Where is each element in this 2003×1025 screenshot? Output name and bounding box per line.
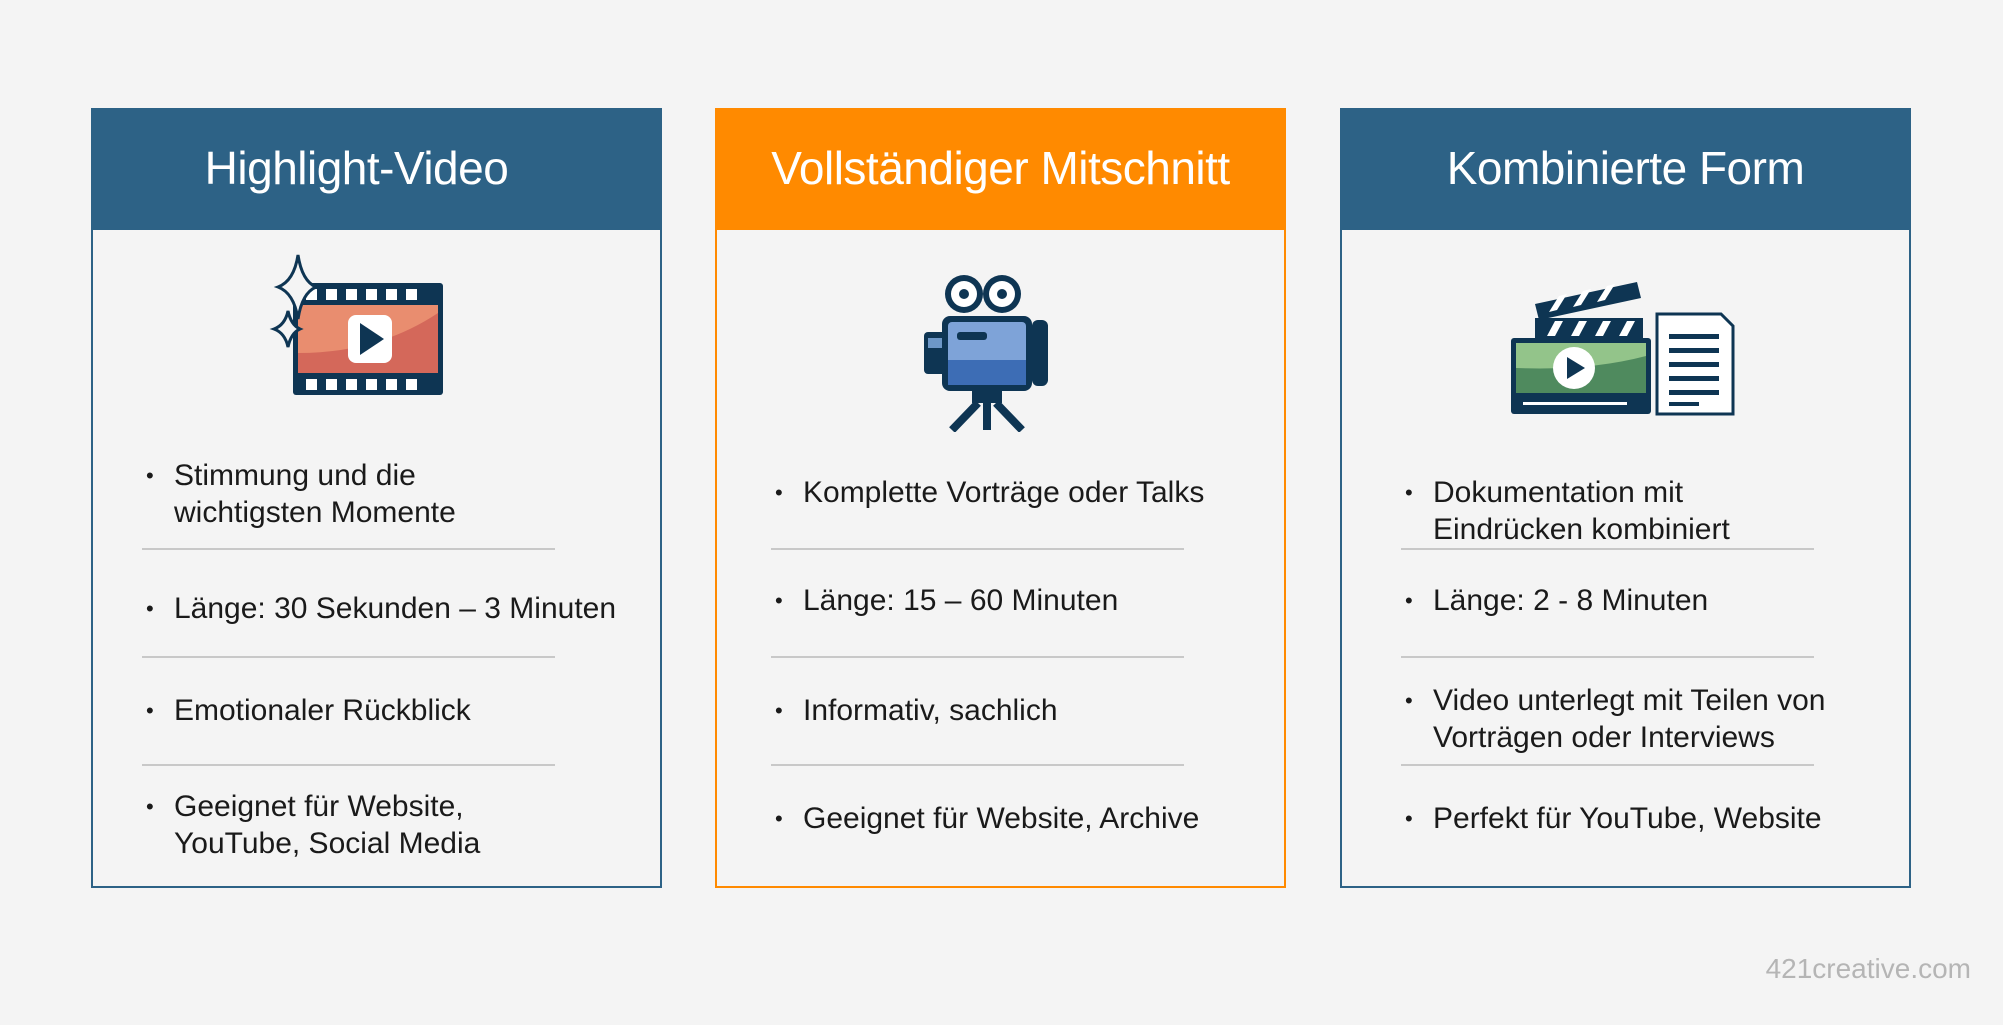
panel: combined form: Vorträgen oder Interviews [1433,721,1775,754]
panel: full recording: Komplette Vorträge oder Talks [803,476,1204,509]
panel: combined form: Perfekt für YouTube, Website [1433,802,1822,835]
header: highlight video [91,108,662,230]
panel: combined form: Dokumentation mit [1433,476,1683,509]
footer credit: 421creative.com [1766,953,1971,984]
panel: highlight video: Geeignet für Website, [174,790,464,823]
panel: combined form: Eindrücken kombiniert [1433,513,1730,546]
panel: highlight video: Länge: 30 Sekunden – 3 Minuten [174,592,616,625]
icon: film strip with play [270,254,443,395]
panel: highlight video: Emotionaler Rückblick [174,694,471,727]
panel: highlight video: wichtigsten Momente [174,496,456,529]
panel: full recording: Länge: 15 – 60 Minuten [803,584,1118,617]
icon: movie camera on tripod [924,275,1048,432]
icon: clapperboard with video and document [1511,282,1734,416]
panel: highlight video: Stimmung und die [174,459,416,492]
header: highlight video: Highlight-Video [205,142,508,194]
header: combined form: Kombinierte Form [1447,142,1804,194]
bullet list [771,476,1204,835]
panel: combined form [1340,108,1911,888]
panel: combined form: Länge: 2 - 8 Minuten [1433,584,1708,617]
bullet list [142,459,616,860]
panel: combined form: Video unterlegt mit Teilen von [1433,684,1825,717]
header: combined form [1340,108,1911,230]
panel: full recording: Geeignet für Website, Archive [803,802,1199,835]
panel: full recording: Informativ, sachlich [803,694,1058,727]
panel: full recording [715,108,1286,888]
header: full recording: Vollständiger Mitschnitt [771,142,1230,194]
panel: highlight video [91,108,662,888]
header: full recording [715,108,1286,230]
panel: highlight video: YouTube, Social Media [174,827,480,860]
bullet list [1401,476,1825,835]
